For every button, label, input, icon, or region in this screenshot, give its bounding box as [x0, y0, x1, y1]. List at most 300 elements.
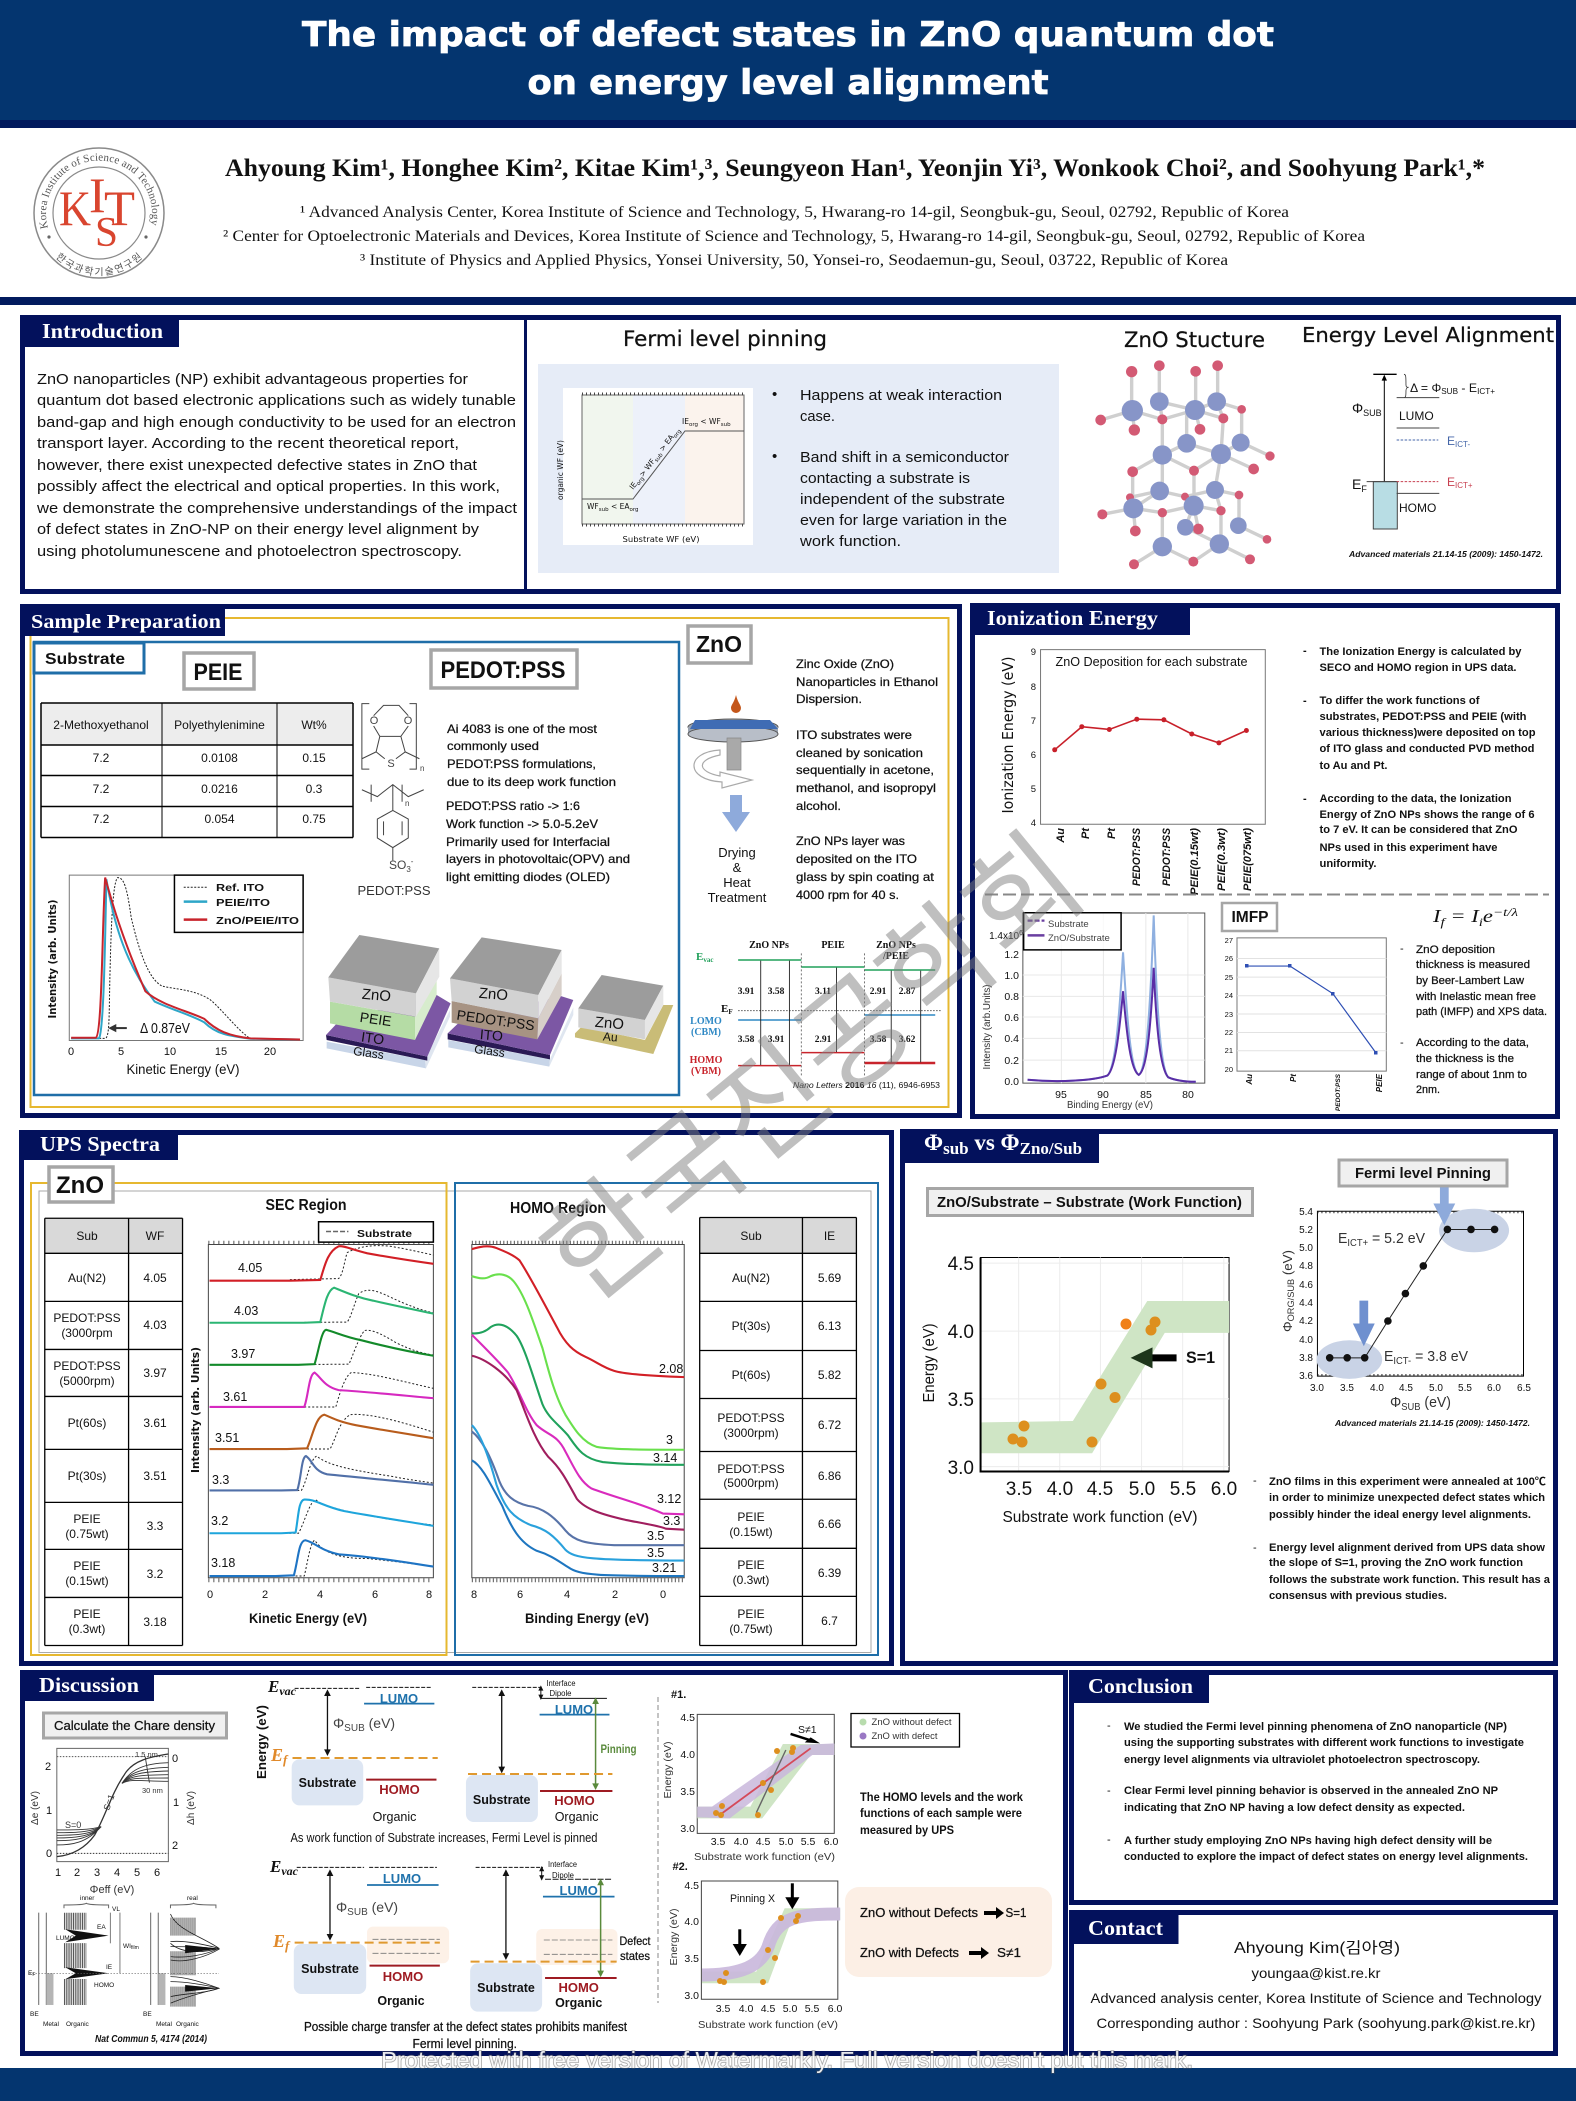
panel: Fermi level pinning — [538, 364, 1059, 573]
line chart: XPS intensity vs binding energy: 0.4 — [1004, 1033, 1019, 1045]
text block: conclusion — [1107, 1720, 1528, 1863]
callout: defect slope summary: S≠1 — [997, 1945, 1021, 1960]
chart: HOMO region — [471, 1200, 684, 1626]
diagram: energy levels at low substrate work function: LUMO — [380, 1691, 418, 1706]
chart: Fermi level pinning: (eV) — [1421, 1394, 1451, 1411]
diagram: ZnO and PEIE band alignment: 3.91 — [768, 1035, 785, 1045]
label: PEDOT:PSS — [431, 650, 577, 688]
diagram: energy level alignment — [1352, 374, 1495, 529]
diagram: ZnO and PEIE band alignment: HOMO — [690, 1055, 723, 1066]
chart: SEC region: Intensity (arb. Units) — [189, 1347, 202, 1473]
text block: conclusion: - — [1107, 1834, 1111, 1846]
diagram: metal and organic band structures: BE — [143, 2011, 152, 2018]
chart: charge density S-curves — [30, 1748, 197, 1896]
diagram: ZnO and PEIE band alignment: 2.87 — [899, 987, 916, 997]
diagram: layer stacks: PEDOT:PSS — [456, 1007, 536, 1033]
line chart: IMFP: 21 — [1225, 1046, 1233, 1055]
scatter chart: energy vs substrate work function: 3.0 — [948, 1458, 974, 1479]
chart: organic WF vs substrate WF: org — [636, 476, 646, 487]
diagram: energy level alignment: E — [1447, 475, 1455, 489]
chart: HOMO region: 3.21 — [652, 1561, 676, 1575]
line chart: ZnO deposition for each substrate: 5 — [1031, 784, 1036, 795]
diagram: defect states at low work function: Substrate — [301, 1962, 359, 1976]
chart #1: without and with defects: 4.5 — [756, 1836, 770, 1848]
table: ionization energy — [700, 1218, 856, 1645]
heading: Conclusion — [1069, 1670, 1209, 1703]
chart: charge density S-curves: 4 — [114, 1867, 120, 1879]
chart: SEC region: 4.05 — [238, 1261, 262, 1275]
text block: introduction — [36, 371, 518, 560]
chart: kinetic energy spectra: Δ 0.87eV — [140, 1020, 190, 1037]
text block: ionization energy notes: - — [1303, 695, 1307, 707]
table: work function: (0.3wt) — [69, 1622, 105, 1636]
text block: PEDOT:PSS description: PEDOT:PSS ratio -> 1:6 — [446, 799, 580, 813]
text block: ZnO preparation: Nanoparticles in Ethanol — [796, 675, 938, 689]
text block: Fermi level pinning bullets: independent of the substrate — [800, 491, 1005, 508]
table: ionization energy: Pt(30s) — [732, 1319, 770, 1333]
text block: ZnO preparation: Zinc Oxide (ZnO) — [796, 657, 894, 671]
heading: Phi sub vs Phi ZnO/Sub: Zno/Sub — [1020, 1139, 1082, 1158]
text block: IMFP notes: by Beer-Lambert Law — [1416, 975, 1524, 987]
chart: Fermi level pinning: 4.5 — [1399, 1383, 1413, 1394]
line chart: ZnO deposition for each substrate — [999, 647, 1265, 895]
chart: HOMO region: 2.08 — [659, 1362, 683, 1376]
diagram: ZnO and PEIE band alignment: (CBM) — [691, 1027, 721, 1038]
text block: ZnO preparation: deposited on the ITO — [796, 852, 917, 866]
diagram: layer stacks: ITO — [479, 1026, 504, 1044]
chart: organic WF vs substrate WF: IE — [627, 480, 639, 491]
diagram: ZnO and PEIE band alignment: LOMO — [690, 1016, 722, 1027]
chart: SEC region: 3.51 — [215, 1431, 239, 1445]
chart #2: pinning X: 6.0 — [828, 2003, 842, 2015]
chart: SEC region: 3.3 — [212, 1473, 229, 1487]
heading: Phi sub vs Phi ZnO/Sub: vs Φ — [969, 1130, 1020, 1155]
line chart: ZnO deposition for each substrate: PEIE(075wt) — [1242, 828, 1254, 891]
caption: charge transfer — [304, 2020, 627, 2051]
diagram: energy level alignment: HOMO — [1399, 501, 1436, 515]
chart: HOMO region: 3.12 — [657, 1492, 681, 1506]
chart: HOMO region: HOMO Region — [510, 1200, 606, 1217]
table: PEIE composition: 7.2 — [93, 812, 110, 826]
text block: introduction: of defect states in ZnO-NP on their energy level alignment by — [37, 521, 480, 538]
diagram: energy levels at low substrate work function: (eV) — [365, 1715, 395, 1731]
diagram: energy levels at low substrate work function: E — [271, 1745, 283, 1765]
line chart: XPS intensity vs binding energy: 85 — [1140, 1089, 1152, 1101]
chart: kinetic energy spectra: 10 — [164, 1046, 176, 1058]
text block: ZnO preparation: methanol, and isopropyl — [796, 781, 936, 795]
heading: Ionization Energy: Ionization Energy — [987, 606, 1159, 630]
watermark: Korean society stamp: 한국진공학회 — [500, 788, 1112, 1333]
table: ionization energy: (0.75wt) — [729, 1622, 773, 1636]
chart: Fermi level pinning: ORG/SUB — [1286, 1279, 1296, 1321]
diagram: layer stacks: ITO — [360, 1029, 385, 1048]
formula: Beer-Lambert: = I — [1445, 906, 1480, 926]
diagram: ZnO and PEIE band alignment: 3.91 — [738, 987, 755, 997]
text: drying and heat treatment: Drying — [718, 845, 756, 860]
diagram: metal and organic band structures: inner — [80, 1895, 95, 1902]
diagram: metal and organic band structures: BE — [30, 2011, 39, 2018]
panel: introduction and Fermi level pinning — [20, 315, 1558, 592]
chart: SEC region: SEC Region — [266, 1197, 346, 1214]
chart: kinetic energy spectra: 0 — [68, 1046, 74, 1058]
diagram: defect states at low work function: LUMO — [383, 1871, 421, 1886]
chart: Fermi level pinning: 5.0 — [1429, 1383, 1443, 1394]
chart: HOMO region: 4 — [564, 1589, 570, 1601]
diagram: energy level alignment: ICT+ — [1455, 481, 1473, 490]
line chart: XPS intensity vs binding energy: Substrate — [1048, 919, 1089, 930]
chart #1: without and with defects: 4.5 — [680, 1712, 695, 1724]
arrow: lower pinning — [1353, 1301, 1375, 1346]
line chart: ZnO deposition for each substrate: PEDOT:PSS — [1161, 827, 1173, 886]
chart: charge density S-curves: Φeff (eV) — [90, 1884, 134, 1896]
diagram: defect states at high work function — [470, 1860, 651, 2012]
text block: ZnO preparation — [796, 657, 938, 902]
chart: Fermi level pinning: ICT- — [1393, 1356, 1411, 1367]
table: work function: (0.15wt) — [65, 1574, 109, 1588]
chart: SEC region: 8 — [426, 1589, 432, 1601]
logo: KIST seal: 한국과학기술연구원 — [56, 252, 142, 276]
panel: Contact — [1069, 1910, 1556, 2054]
diagram: metal and organic band structures — [28, 1895, 219, 2028]
title — [302, 15, 1274, 103]
table: PEIE composition: Polyethylenimine — [174, 718, 265, 732]
chart: charge density S-curves: Δe (eV) — [30, 1791, 41, 1825]
chart: kinetic energy spectra: Intensity (arb. Units) — [47, 900, 59, 1018]
diagram: ZnO and PEIE band alignment: E — [696, 951, 703, 963]
text block: introduction: possibly affect the electrical and optical properties. In this work, — [37, 478, 500, 495]
text block: annealing and slope notes: - — [1253, 1475, 1257, 1487]
line chart: XPS intensity vs binding energy — [982, 913, 1205, 1111]
chart: HOMO region: 3.5 — [647, 1529, 664, 1543]
chart #2: pinning X: #2. — [672, 1861, 688, 1873]
chart: kinetic energy spectra: PEIE/ITO — [216, 897, 270, 909]
scatter chart: energy vs substrate work function: 4.5 — [948, 1254, 974, 1275]
text block: annealing and slope notes: - — [1253, 1542, 1257, 1554]
chart: Fermi level pinning: 4.0 — [1299, 1335, 1313, 1346]
text block: introduction: transport layer. According to the recent theoretical report, — [37, 435, 459, 452]
line chart: IMFP: Pt — [1289, 1074, 1298, 1082]
chart: Fermi level pinning: (eV) — [1280, 1250, 1295, 1279]
diagram: energy level alignment: Φ — [1352, 400, 1363, 416]
chart #1: without and with defects: #1. — [671, 1689, 686, 1701]
line chart: ZnO deposition for each substrate: Pt — [1106, 827, 1118, 839]
chart: kinetic energy spectra: 5 — [118, 1046, 124, 1058]
table: ionization energy: (0.15wt) — [729, 1525, 773, 1539]
text block: PEDOT:PSS description: Work function -> 5.0-5.2eV — [446, 817, 598, 831]
diagram: energy level alignment: ICT+ — [1477, 387, 1495, 396]
diagram: energy level alignment: F — [1361, 484, 1367, 494]
chart #2: pinning X: 5.0 — [783, 2003, 797, 2015]
text block: annealing and slope notes: follows the substrate work function. This result has a — [1269, 1574, 1551, 1586]
diagram: defect states at low work function: HOMO — [383, 1969, 423, 1984]
text block: PEDOT:PSS description: Ai 4083 is one of the most — [447, 722, 598, 736]
scatter chart: energy vs substrate work function: 6.0 — [1211, 1479, 1237, 1500]
table: work function: WF — [146, 1229, 164, 1243]
callout: defect slope summary: ZnO with Defects — [860, 1945, 959, 1960]
text block: HOMO levels note — [860, 1792, 1024, 1837]
chart #2: pinning X: 4.0 — [739, 2003, 753, 2015]
chart #2: pinning X — [668, 1861, 842, 2031]
label: ZnO/Substrate – Substrate (Work Function) — [928, 1188, 1252, 1216]
diagram: energy level alignment: SUB — [1363, 408, 1382, 418]
citation: Nat Commun 5, 4174 (2014) — [95, 2034, 208, 2045]
chart: organic WF vs substrate WF: < WF — [698, 417, 721, 426]
diagram: energy levels at low substrate work function: SUB — [344, 1723, 365, 1734]
text block: ZnO preparation: sequentially in acetone, — [796, 763, 934, 777]
line chart: IMFP: 26 — [1225, 954, 1233, 963]
chart: charge density S-curves: 5 — [134, 1867, 140, 1879]
text block: annealing and slope notes: Energy level alignment derived from UPS data show — [1269, 1542, 1545, 1554]
scatter chart: energy vs substrate work function: 4.0 — [1047, 1479, 1073, 1500]
table: PEIE composition: 0.75 — [302, 812, 326, 826]
text block: introduction: ZnO nanoparticles (NP) exhibit advantageous properties for — [37, 371, 468, 388]
table: work function: 3.97 — [143, 1366, 167, 1380]
table: PEIE composition: 0.054 — [204, 812, 235, 826]
line chart: ZnO deposition for each substrate: PEDOT:PSS — [1131, 827, 1143, 886]
table: ionization energy: Au(N2) — [732, 1271, 770, 1285]
chart #1: without and with defects: 3.0 — [680, 1823, 695, 1835]
text block: annealing and slope notes: the slope of S=1, proving the ZnO work function — [1269, 1557, 1523, 1569]
text block: IMFP notes: - — [1400, 943, 1404, 955]
title: The impact of defect states in ZnO quantum dot — [302, 15, 1274, 55]
text block: Fermi level pinning bullets: even for large variation in the — [800, 512, 1007, 529]
line chart: XPS intensity vs binding energy: 6 — [1019, 930, 1023, 937]
chart #2: pinning X: 4.5 — [761, 2003, 775, 2015]
chart: kinetic energy spectra: 20 — [264, 1046, 276, 1058]
line chart: ZnO deposition for each substrate: Au — [1055, 828, 1067, 844]
line chart: XPS intensity vs binding energy: 0.2 — [1004, 1055, 1019, 1067]
text block: ZnO preparation: ZnO NPs layer was — [796, 834, 905, 848]
line chart: XPS intensity vs binding energy: 1.2 — [1004, 949, 1019, 961]
text block: Fermi level pinning bullets: Band shift in a semiconductor — [800, 449, 1009, 466]
chart: organic WF vs substrate WF: org — [689, 422, 698, 428]
table: ionization energy: PEDOT:PSS — [717, 1462, 785, 1476]
text block: conclusion: Clear Fermi level pinning behavior is observed in the annealed ZnO NP — [1124, 1785, 1498, 1797]
text block: conclusion: - — [1107, 1720, 1111, 1732]
chart: Fermi level pinning: SUB — [1401, 1402, 1421, 1413]
heading: Introduction — [20, 315, 179, 347]
text block: conclusion: We studied the Fermi level pinning phenomena of ZnO nanoparticle (NP) — [1124, 1721, 1507, 1733]
chart: Fermi level pinning: Φ — [1390, 1394, 1402, 1411]
table: work function: Pt(30s) — [68, 1469, 106, 1483]
diagram: layer stacks: Glass — [352, 1044, 385, 1062]
diagram: ZnO and PEIE band alignment: /PEIE — [882, 951, 909, 962]
chart #2: pinning X: Pinning X — [730, 1893, 776, 1905]
y axis label: Energy (eV): Energy (eV) — [254, 1705, 269, 1779]
label: Substrate — [34, 643, 144, 673]
diagram: ZnO crystal structure — [1095, 360, 1275, 569]
line chart: XPS intensity vs binding energy: Binding Energy (eV) — [1067, 1100, 1153, 1111]
text block: ionization energy notes: to 7 eV. It can be considered that ZnO — [1320, 824, 1518, 836]
table: ionization energy: 6.13 — [818, 1319, 842, 1333]
text block: Fermi level pinning bullets: Happens at weak interaction — [800, 387, 1002, 404]
diagram: energy levels at high substrate work function: HOMO — [554, 1793, 595, 1808]
diagram: energy levels at high substrate work function: Interface — [546, 1679, 576, 1688]
line chart: ZnO deposition for each substrate: 9 — [1031, 647, 1036, 658]
title: on energy level alignment — [528, 63, 1048, 103]
chart: organic WF vs substrate WF: < EA — [609, 502, 630, 511]
text: drying and heat treatment: Heat — [723, 875, 751, 890]
text block: IMFP notes — [1400, 943, 1547, 1096]
chart: SEC region: 3.61 — [223, 1390, 247, 1404]
chart: kinetic energy spectra: ZnO/PEIE/ITO — [216, 915, 299, 927]
table: ionization energy: 6.7 — [821, 1614, 838, 1628]
text: drying and heat treatment: & — [733, 860, 742, 875]
table: PEIE composition: 0.0108 — [201, 751, 238, 765]
heading: Phi sub vs Phi ZnO/Sub — [900, 1129, 1099, 1163]
chart: Fermi level pinning: 3.5 — [1340, 1383, 1354, 1394]
chart: HOMO region: 3.3 — [663, 1514, 680, 1528]
diagram: PEDOT:PSS molecular structure: - — [411, 857, 414, 866]
chart: organic WF vs substrate WF: organic WF (eV) — [556, 440, 565, 500]
chart: charge density S-curves: 2 — [45, 1761, 51, 1773]
chart #1: without and with defects: 3.5 — [680, 1786, 695, 1798]
diagram: ZnO and PEIE band alignment: ZnO NPs — [876, 940, 916, 951]
diagram: layer stacks: ZnO — [361, 986, 392, 1005]
chart: Fermi level pinning: 6.0 — [1487, 1383, 1501, 1394]
line chart: ZnO deposition for each substrate: 4 — [1031, 818, 1036, 829]
line chart: ZnO deposition for each substrate: PEIE(0.15wt) — [1189, 828, 1201, 895]
diagram: layer stacks — [326, 935, 673, 1068]
chart #1: without and with defects: 5.5 — [801, 1836, 815, 1848]
chart: charge density S-curves: S=1 — [101, 1793, 116, 1812]
label: Fermi level Pinning: Fermi level Pinning — [1355, 1166, 1491, 1182]
scatter chart: energy vs substrate work function: 3.5 — [948, 1390, 974, 1411]
heading: Conclusion: Conclusion — [1088, 1674, 1193, 1698]
heading: UPS Spectra: UPS Spectra — [40, 1132, 161, 1156]
diagram: energy levels at high substrate work function: Pinning — [600, 1742, 636, 1756]
scatter chart: energy vs substrate work function: S=1 — [1186, 1348, 1215, 1367]
table: work function: PEIE — [73, 1512, 101, 1526]
chart: charge density S-curves: S=0 — [65, 1820, 81, 1830]
text block: IMFP notes: 2nm. — [1416, 1084, 1440, 1096]
chart: HOMO region: Binding Energy (eV) — [525, 1610, 649, 1626]
diagram: energy level alignment: SUB — [1441, 387, 1458, 396]
chart: charge density S-curves: 2 — [172, 1840, 178, 1852]
text block: IMFP notes: path (IMFP) and XPS data. — [1416, 1006, 1547, 1018]
text block: IMFP notes: ZnO deposition — [1416, 944, 1495, 956]
diagram: metal and organic band structures: HOMO — [94, 1982, 114, 1989]
chart: kinetic energy spectra: Ref. ITO — [216, 882, 264, 894]
scatter chart: energy vs substrate work function: Substrate work function (eV) — [1002, 1509, 1198, 1526]
diagram: defect states at low work function: f — [285, 1938, 291, 1953]
table: work function: 3.18 — [143, 1615, 167, 1629]
diagram: metal and organic band structures: IE — [106, 1964, 113, 1971]
diagram: ZnO and PEIE band alignment: 2.91 — [870, 987, 887, 997]
text block: Fermi level pinning bullets: work function. — [799, 533, 901, 550]
table: PEIE composition: 7.2 — [93, 751, 110, 765]
diagram: metal and organic band structures: EA — [97, 1924, 106, 1931]
label: PEDOT:PSS: PEDOT:PSS — [440, 657, 566, 684]
logo: KIST seal: K — [59, 180, 91, 236]
chart #2: pinning X: 3.5 — [684, 1953, 699, 1965]
line chart: IMFP: 20 — [1225, 1065, 1233, 1074]
text block: conclusion: using the supporting substrates with different work functions to investigate — [1124, 1737, 1524, 1749]
diagram: layer stacks: ZnO — [594, 1014, 625, 1033]
formula: Beer-Lambert: −t/λ — [1493, 905, 1518, 919]
chart: SEC region: Kinetic Energy (eV) — [249, 1610, 367, 1626]
text block: contact details: youngaa@kist.re.kr — [1252, 1965, 1381, 1981]
diagram: energy levels at low substrate work function: Φ — [333, 1715, 344, 1731]
diagram: energy levels at high substrate work function — [466, 1679, 636, 1824]
chart: HOMO region: 2 — [612, 1589, 618, 1601]
table: PEIE composition: 2-Methoxyethanol — [53, 718, 149, 732]
text block: HOMO levels note: measured by UPS — [860, 1825, 954, 1837]
chart #1: without and with defects: Substrate work function (eV) — [694, 1851, 835, 1863]
heading: Ionization Energy — [970, 603, 1190, 635]
affiliations — [223, 204, 1365, 269]
chart #1: without and with defects: 6.0 — [824, 1836, 838, 1848]
label: Calculate the Chare density — [44, 1713, 226, 1738]
diagram: defect states at high work function: Dipole — [552, 1871, 575, 1880]
table: PEIE composition: Wt% — [301, 718, 327, 732]
chart #1: without and with defects — [662, 1689, 838, 1863]
diagram: energy level alignment: ICT- — [1455, 440, 1470, 449]
diagram: defect states at high work function: Defect — [620, 1934, 651, 1948]
citation: Advanced materials 21.14-15 (2009): 1450-1472. — [1334, 1418, 1530, 1428]
diagram: defect states at low work function: Organic — [377, 1994, 425, 2008]
heading: Discussion: Discussion — [39, 1673, 139, 1697]
diagram: PEDOT:PSS molecular structure: PEDOT:PSS — [358, 883, 431, 898]
chart: Fermi level pinning: ICT+ — [1347, 1238, 1368, 1249]
chart: charge density S-curves: 1 — [46, 1805, 52, 1817]
line chart: ZnO deposition for each substrate: PEIE(0.3wt) — [1216, 828, 1228, 891]
line chart: ZnO deposition for each substrate: ZnO Deposition for each substrate — [1056, 654, 1248, 669]
text: drying and heat treatment — [708, 845, 767, 905]
table: ionization energy: PEDOT:PSS — [717, 1411, 785, 1425]
diagram: energy levels at low substrate work function: HOMO — [379, 1782, 420, 1797]
panel: work function comparison — [900, 1129, 1556, 1664]
diagram: PEDOT:PSS molecular structure — [358, 704, 431, 898]
text block: ZnO preparation: ITO substrates were — [796, 728, 912, 742]
chart #1: without and with defects: 4.0 — [680, 1749, 695, 1761]
callout: defect slope summary — [845, 1887, 1052, 1977]
label: IMFP: IMFP — [1231, 909, 1269, 926]
label: ZnO: ZnO — [696, 631, 742, 657]
diagram: ZnO and PEIE band alignment: 3.11 — [815, 987, 831, 997]
diagram: ZnO and PEIE band alignment — [690, 940, 941, 1090]
diagram: energy level alignment: Δ = Φ — [1410, 381, 1441, 395]
heading: Fermi level pinning: Fermi level pinning — [623, 327, 827, 351]
chart: SEC region: Substrate — [357, 1228, 412, 1240]
chart #1: without and with defects: 3.5 — [711, 1836, 725, 1848]
diagram: layer stacks: Glass — [473, 1042, 506, 1060]
chart #1: without and with defects: S≠1 — [798, 1724, 817, 1736]
diagram: defect states at low work function — [269, 1857, 449, 2008]
table: PEIE composition: 7.2 — [93, 782, 110, 796]
diagram: ZnO and PEIE band alignment: E — [721, 1003, 728, 1015]
table: work function: PEIE — [73, 1559, 101, 1573]
text block: HOMO levels note: The HOMO levels and the work — [860, 1792, 1024, 1804]
diagram: defect states at low work function: E — [270, 1857, 281, 1876]
text block: PEDOT:PSS description: layers in photovoltaic(OPV) and — [446, 852, 630, 866]
logo: KIST seal: I — [89, 167, 106, 223]
text block: annealing and slope notes: ZnO films in this experiment were annealed at 100℃ — [1269, 1476, 1546, 1488]
line chart: IMFP: 23 — [1225, 1010, 1233, 1019]
scatter chart: energy vs substrate work function: 5.0 — [1129, 1479, 1155, 1500]
heading: Phi sub vs Phi ZnO/Sub: Φ — [924, 1130, 943, 1155]
heading: Sample Preparation — [20, 604, 225, 636]
text block: PEDOT:PSS description: light emitting diodes (OLED) — [446, 870, 610, 884]
text block: Fermi level pinning bullets: • — [772, 386, 777, 403]
diagram: energy level alignment: - E — [1458, 381, 1477, 395]
chart: HOMO region: 6 — [517, 1589, 523, 1601]
text block: conclusion: indicating that ZnO NP having a low defect density as expected. — [1124, 1802, 1465, 1814]
text block: ZnO preparation: 4000 rpm for 40 s. — [796, 888, 899, 902]
chart: kinetic energy spectra: 15 — [215, 1046, 227, 1058]
table: ionization energy: IE — [824, 1229, 835, 1243]
chart: Fermi level pinning: 4.4 — [1299, 1298, 1313, 1309]
